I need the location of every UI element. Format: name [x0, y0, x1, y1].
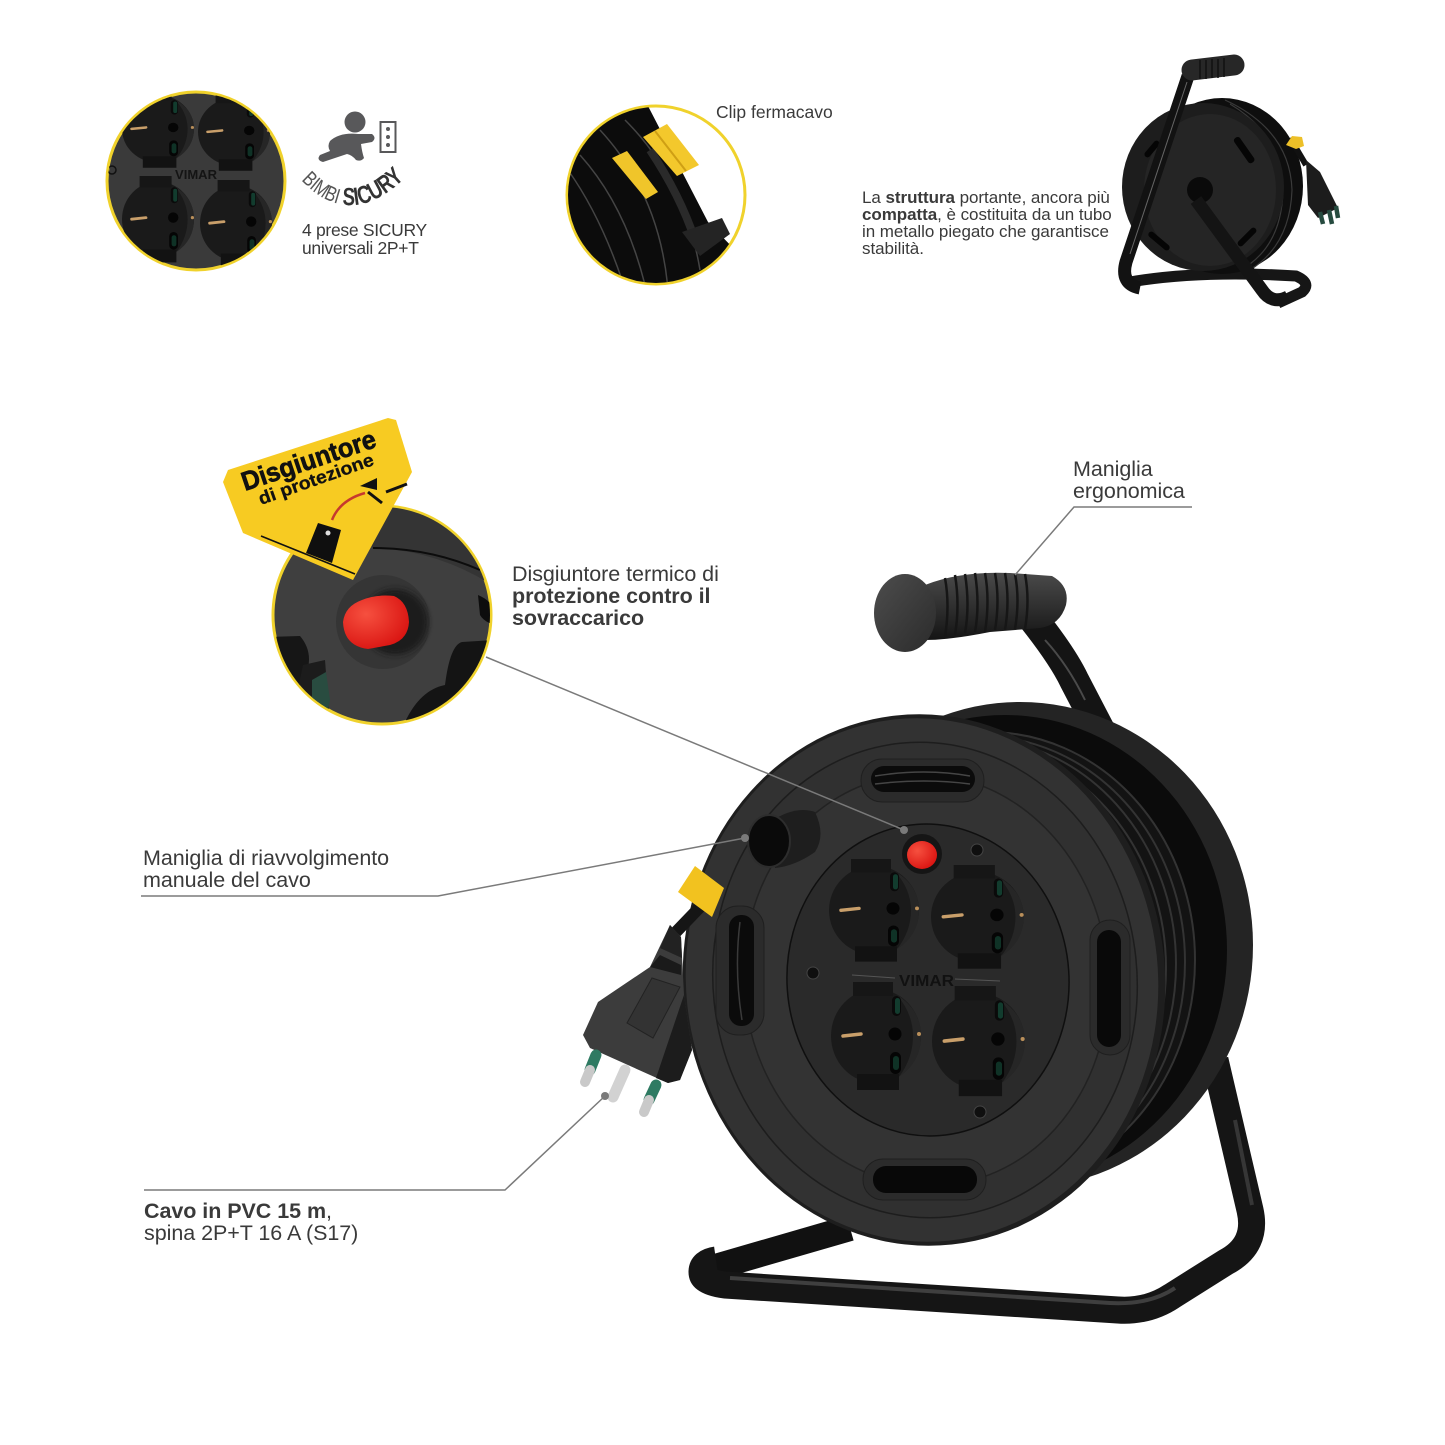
text: cavo in PVC: Cavo in PVC 15 m,	[144, 1199, 332, 1223]
frame tube	[1125, 76, 1188, 288]
logo: Bimbi Sicury	[302, 166, 401, 206]
text: struttura portante: stabilità.	[862, 239, 924, 258]
panel: struttura	[862, 58, 1338, 303]
grip cap	[874, 574, 936, 652]
small reel rear view	[1122, 58, 1338, 303]
text: disgiuntore termico: sovraccarico	[512, 606, 644, 630]
red button	[343, 596, 409, 649]
logo: Bimbi Sicury: BIMBI	[302, 170, 340, 204]
socket plate	[776, 815, 1080, 1145]
detail circle: red breaker button	[265, 500, 500, 725]
leader line: disgiuntore	[486, 657, 908, 834]
text: maniglia di riavvolgimento: manuale del cavo	[143, 868, 311, 892]
brand: VIMAR	[899, 973, 954, 990]
text: 4 prese SICURY: 4 prese SICURY	[302, 220, 427, 240]
text: maniglia di riavvolgimento: Maniglia di riavvolgimento	[143, 846, 389, 870]
yellow cable clip	[678, 866, 724, 917]
panel: disgiuntore callout	[223, 418, 719, 725]
detail circle: four sockets: VIMAR	[175, 168, 217, 182]
detail circle: four sockets	[107, 90, 285, 270]
label heading: Disgiuntore	[237, 424, 380, 497]
text: struttura portante: compatta, è costituita da un tubo	[862, 205, 1112, 224]
yellow clip	[643, 124, 699, 176]
text: struttura portante: in metallo piegato che garantisce	[862, 222, 1109, 241]
label subheading: di protezione	[256, 450, 376, 509]
plug	[583, 925, 692, 1112]
lower frame tube	[702, 1060, 1252, 1310]
text: maniglia ergonomica: ergonomica	[1073, 479, 1185, 503]
leader line: cavo in PVC	[144, 1092, 609, 1190]
text: 4 prese SICURY: universali 2P+T	[302, 238, 419, 258]
leader line: maniglia ergonomica	[1015, 507, 1192, 575]
detail circle: yellow clips on cable	[560, 100, 750, 290]
panel: prese SICURY	[106, 90, 427, 272]
red breaker button	[902, 834, 942, 874]
cable windings	[748, 732, 1195, 1198]
leader line: maniglia di riavvolgimento	[141, 834, 749, 896]
upper frame tube	[1030, 615, 1100, 730]
plug cord	[676, 905, 702, 932]
panel: clip fermacavo	[560, 100, 833, 290]
text: struttura portante: La struttura portante, ancora più	[862, 188, 1110, 207]
text: disgiuntore termico: Disgiuntore termico di	[512, 562, 719, 586]
hand slots	[716, 759, 1130, 1200]
label icon: fuse and wire	[306, 478, 407, 563]
sockets	[829, 859, 1025, 1096]
main product: cable reel	[583, 573, 1253, 1310]
handle grip	[874, 573, 1067, 652]
yellow clip	[612, 151, 658, 199]
rear flange	[787, 702, 1253, 1188]
text: clip fermacavo: Clip fermacavo	[716, 102, 833, 122]
plug and clip	[1290, 138, 1306, 165]
yellow label: disgiuntore di protezione	[223, 418, 412, 580]
text: maniglia ergonomica: Maniglia	[1073, 457, 1153, 481]
screws	[807, 844, 986, 1118]
plug pins	[585, 1055, 656, 1112]
text: cavo in PVC: spina 2P+T 16 A (S17)	[144, 1221, 358, 1245]
front disk	[657, 690, 1191, 1270]
rear flange inner shadow	[783, 715, 1227, 1185]
rewind crank handle	[748, 810, 820, 868]
icon: crawling baby and socket	[319, 112, 396, 162]
text: disgiuntore termico: protezione contro il	[512, 584, 710, 608]
logo: Bimbi Sicury: SICURY	[343, 166, 401, 206]
handle grip	[1192, 65, 1234, 70]
